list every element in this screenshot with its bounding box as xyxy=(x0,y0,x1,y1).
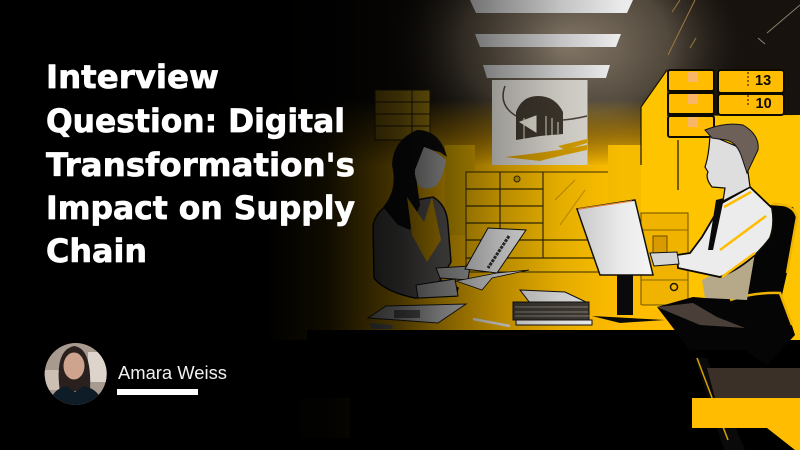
desk xyxy=(307,302,757,450)
computer monitor xyxy=(577,200,665,323)
scarf xyxy=(407,197,441,262)
author underline bar xyxy=(117,389,198,395)
hand xyxy=(650,252,679,266)
woman xyxy=(373,130,470,298)
title xyxy=(46,58,355,270)
torso shadow xyxy=(702,253,755,300)
background cabinets xyxy=(445,145,643,275)
ceiling streaks xyxy=(668,0,800,55)
chair leg xyxy=(695,358,745,450)
tie xyxy=(708,198,724,250)
neck and face xyxy=(705,135,750,201)
title: Chain xyxy=(46,232,147,270)
ceiling lights xyxy=(470,0,633,78)
floor xyxy=(300,368,800,450)
author name: Amara Weiss xyxy=(118,363,227,383)
right box wall xyxy=(641,70,800,340)
title: Interview xyxy=(46,58,219,96)
title: Impact on Supply xyxy=(46,189,355,227)
author avatar xyxy=(44,343,107,405)
title: Question: Digital xyxy=(46,102,345,140)
man xyxy=(650,124,773,300)
illustration: office scene xyxy=(250,0,800,450)
poster on wall xyxy=(492,80,588,165)
title: Transformation's xyxy=(46,146,355,184)
shirt and arm xyxy=(677,187,773,277)
arms and hands xyxy=(416,266,470,298)
stack of books xyxy=(513,290,592,325)
label 10: 10 xyxy=(756,96,772,112)
background boxes: left stack xyxy=(375,90,430,140)
face xyxy=(415,147,446,189)
label 13: 13 xyxy=(755,73,771,89)
document in hand xyxy=(456,228,529,290)
papers on desk xyxy=(368,304,510,329)
body xyxy=(373,197,458,298)
hair xyxy=(383,130,447,230)
back wall and ceiling xyxy=(250,0,800,340)
numbered boxes xyxy=(668,70,784,137)
hair xyxy=(705,124,758,173)
chair xyxy=(657,204,797,365)
back printer cabinet xyxy=(641,213,688,305)
